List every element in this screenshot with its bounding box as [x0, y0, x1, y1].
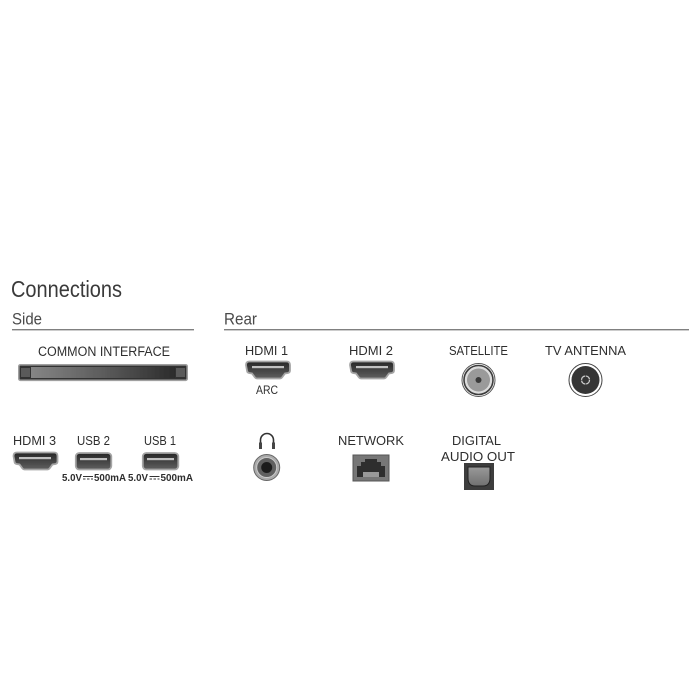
port: HDMI 3: HDMI 3	[13, 433, 56, 448]
port: HDMI 1	[245, 343, 290, 397]
port: USB 2: 5.0V	[62, 473, 82, 484]
port: digital audio out: AUDIO OUT	[441, 449, 515, 464]
port: satellite	[449, 343, 508, 396]
port: common interface: COMMON INTERFACE	[38, 344, 170, 359]
port: USB 1	[128, 433, 193, 484]
port: HDMI 1: ARC	[256, 385, 278, 397]
port: HDMI 3	[13, 433, 58, 470]
title: Connections	[11, 276, 122, 302]
heading: rear: Rear	[224, 310, 257, 328]
port: USB 1: 5.0V	[128, 473, 148, 484]
port: USB 2: 500mA	[94, 473, 126, 484]
port: headphones	[254, 434, 280, 480]
port: USB 2: USB 2	[77, 433, 110, 448]
heading: side: Side	[12, 310, 42, 328]
port: HDMI 2	[349, 343, 394, 378]
port: satellite: SATELLITE	[449, 343, 508, 358]
port: HDMI 2: HDMI 2	[349, 343, 393, 358]
port: TV antenna	[545, 343, 626, 396]
port: network	[338, 433, 404, 481]
port: TV antenna: TV ANTENNA	[545, 343, 626, 358]
icon: headphones	[259, 434, 275, 449]
port: network: NETWORK	[338, 433, 404, 448]
port: digital audio out: DIGITAL	[452, 433, 501, 448]
port: USB 1: 500mA	[160, 473, 193, 484]
port: USB 2	[62, 433, 126, 484]
port: common interface	[19, 344, 187, 380]
port: USB 1: USB 1	[144, 433, 176, 448]
port: HDMI 1: HDMI 1	[245, 343, 288, 358]
port: digital audio out	[441, 433, 515, 490]
